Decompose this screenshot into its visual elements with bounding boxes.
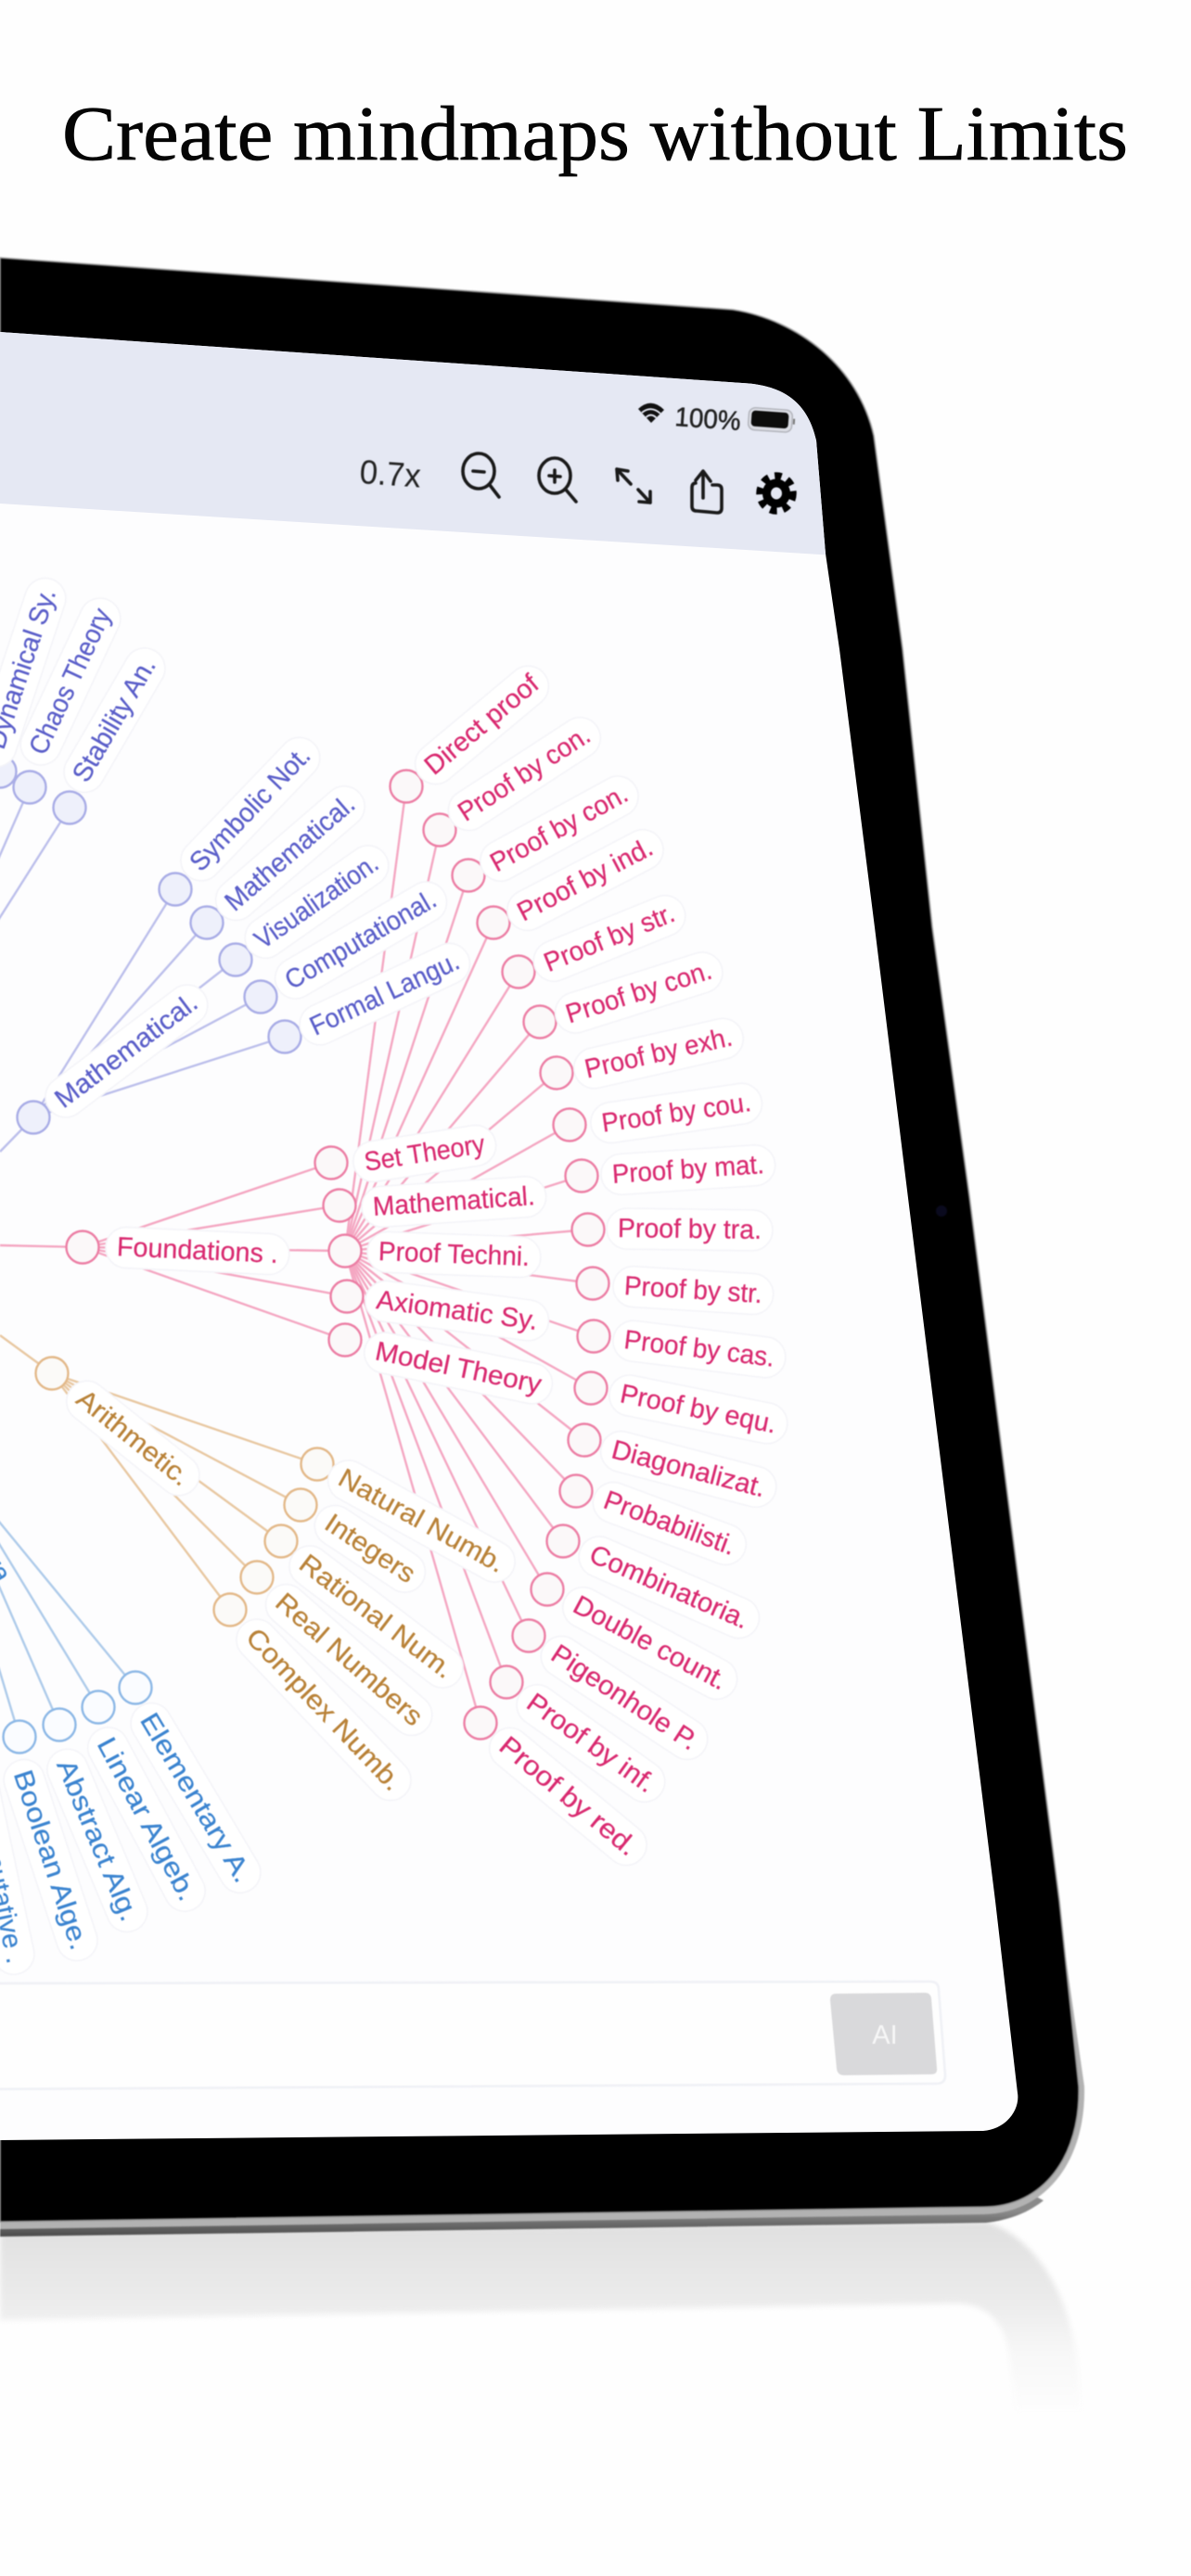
node: Mathematical.: Mathematical. xyxy=(372,1181,536,1222)
node: Proof by con. 2: Proof by con. xyxy=(485,779,634,878)
node: Proof by con. 1: Proof by con. xyxy=(453,721,596,827)
node: Direct proof xyxy=(388,671,540,805)
node: Proof by red. xyxy=(464,1706,655,1873)
toolbar xyxy=(0,325,835,555)
node: Double count. xyxy=(529,1571,722,1690)
node: Commutative . xyxy=(0,1768,38,1978)
branch: foundations nodes xyxy=(67,657,791,1873)
icon: zoom in xyxy=(539,458,576,502)
node: Proof by red.: Proof by red. xyxy=(493,1731,643,1862)
node: Proof by cas. xyxy=(575,1319,772,1367)
node: Stability An.: Stability An. xyxy=(67,653,162,787)
node: Diagonalizat.: Diagonalizat. xyxy=(608,1435,769,1503)
node: Elementary A. xyxy=(119,1671,268,1900)
node: Elementary A.: Elementary A. xyxy=(134,1708,258,1888)
node: Proof by cou.: Proof by cou. xyxy=(600,1088,753,1139)
node: Combinatoria.: Combinatoria. xyxy=(585,1539,753,1635)
node: Axiomatic Sy.: Axiomatic Sy. xyxy=(375,1285,540,1336)
node: Probabilisti. xyxy=(558,1473,731,1556)
node: Proof by mat. xyxy=(564,1155,763,1194)
icon: share xyxy=(692,471,722,513)
node: Proof by str. 1: Proof by str. xyxy=(540,899,679,978)
node: Foundations . xyxy=(67,1226,290,1275)
node: Proof by tra.: Proof by tra. xyxy=(618,1214,762,1245)
icon: battery xyxy=(748,407,796,433)
node: Chaos Theory xyxy=(11,607,113,805)
node: Proof by str. 1 xyxy=(501,909,675,990)
node: Proof by exh.: Proof by exh. xyxy=(582,1023,736,1085)
node: Complex Numb. xyxy=(213,1593,419,1809)
node: Proof by con. 1 xyxy=(421,733,591,848)
node: Double count.: Double count. xyxy=(568,1590,732,1696)
node: Rational Num.: Rational Num. xyxy=(293,1549,459,1685)
connectors: mathematical branch xyxy=(0,787,285,1152)
node: Model Theory: Model Theory xyxy=(373,1336,544,1400)
node: Natural Numb.: Natural Numb. xyxy=(333,1463,510,1579)
node: Abstract Alg.: Abstract Alg. xyxy=(50,1755,145,1926)
node: Computational.: Computational. xyxy=(280,885,442,996)
branch: arithmetic nodes xyxy=(35,1358,522,1809)
node: Proof by con. 3: Proof by con. xyxy=(562,956,715,1029)
node: Pigeonhole P.: Pigeonhole P. xyxy=(545,1639,703,1756)
AI button xyxy=(830,1993,937,2075)
node: Proof Techni. xyxy=(328,1231,542,1278)
tablet frame xyxy=(0,258,1084,2237)
node: Arithmetic. xyxy=(35,1358,208,1504)
node: Proof by str. 2: Proof by str. xyxy=(623,1271,763,1309)
node: Proof by str. 2 xyxy=(575,1265,761,1306)
node: Set Theory xyxy=(315,1122,499,1185)
node: Axiomatic Sy. xyxy=(330,1279,551,1344)
node: Foundations .: Foundations . xyxy=(116,1232,279,1269)
node: Mathematical. xyxy=(189,797,356,940)
node: Boolean Alge.: Boolean Alge. xyxy=(7,1766,94,1954)
screen xyxy=(0,332,1018,2140)
node: Chaos Theory: Chaos Theory xyxy=(24,604,118,759)
node: Real Numbers xyxy=(241,1562,441,1743)
node: Direct proof: Direct proof xyxy=(419,669,545,781)
node: Proof by con. 2 xyxy=(451,792,629,894)
front camera xyxy=(936,1205,947,1217)
icon: wifi xyxy=(638,403,664,423)
node: Boolean Alge. xyxy=(0,1721,103,1966)
node: Abstract Alg. xyxy=(41,1708,154,1938)
node: Combinatoria. xyxy=(545,1523,744,1628)
mindmap xyxy=(0,573,791,1978)
icon: expand xyxy=(617,469,650,503)
reflection of tablet on surface xyxy=(0,2222,1081,2411)
node: Natural Numb. xyxy=(301,1448,522,1589)
node: Visualization. xyxy=(217,861,379,977)
icon: settings gear xyxy=(760,476,793,511)
node: Proof by cas.: Proof by cas. xyxy=(622,1325,776,1373)
node: Computational. xyxy=(243,881,437,1014)
node: Proof by exh. xyxy=(538,1029,733,1090)
branch: mathematical nodes xyxy=(0,573,477,1133)
node: Mathematical. parent: Mathematical. xyxy=(49,988,203,1115)
node: Model Theory xyxy=(328,1324,556,1408)
toolbar icons xyxy=(463,453,722,513)
node: Proof by mat.: Proof by mat. xyxy=(611,1150,765,1190)
node: Proof by cou. xyxy=(551,1097,750,1142)
input bar xyxy=(0,1982,945,2089)
node: Mathematical.: Mathematical. xyxy=(220,789,361,917)
node: Linear Algeb. xyxy=(81,1691,212,1919)
node: Complex Numb.: Complex Numb. xyxy=(239,1623,408,1797)
node: Pigeonhole P. xyxy=(510,1617,695,1751)
node: Mathematical. xyxy=(323,1175,547,1229)
node: Proof Techni.: Proof Techni. xyxy=(378,1237,530,1272)
zoom level: 0.7x xyxy=(358,453,422,495)
tablet dark lower rim xyxy=(0,2188,1044,2237)
title: Create mindmaps without Limits xyxy=(62,91,1128,177)
node: Mathematical. parent xyxy=(15,987,200,1135)
node: Visualization.: Visualization. xyxy=(250,848,384,955)
node: Proof by con. 3 xyxy=(521,966,712,1040)
node: Symbolic Not.: Symbolic Not. xyxy=(184,741,316,877)
node: Proof by equ. xyxy=(573,1371,774,1435)
AI button background xyxy=(830,1993,937,2075)
node: Probabilisti.: Probabilisti. xyxy=(599,1486,739,1562)
node: Integers: Integers xyxy=(319,1509,421,1589)
battery percentage: 100% xyxy=(674,402,742,437)
icon: zoom out xyxy=(463,453,499,497)
node: Proof by ind. xyxy=(475,839,653,940)
connectors: arithmetic branch xyxy=(0,1335,317,1610)
node: Real Numbers: Real Numbers xyxy=(269,1588,429,1732)
node: Stability An. xyxy=(52,665,156,825)
node: Symbolic Not. xyxy=(160,729,328,905)
node: Proof by inf. xyxy=(488,1664,653,1793)
node: Arithmetic.: Arithmetic. xyxy=(70,1384,196,1492)
node: Linear Algeb.: Linear Algeb. xyxy=(91,1732,202,1906)
node: Integers xyxy=(284,1489,433,1600)
node: Proof by inf.: Proof by inf. xyxy=(521,1688,660,1799)
node: Set Theory: Set Theory xyxy=(363,1129,487,1178)
toolbar background xyxy=(0,325,835,555)
node: Formal Langu.: Formal Langu. xyxy=(305,947,464,1041)
AI button label: AI xyxy=(872,2021,898,2050)
tablet bezel xyxy=(0,258,1079,2222)
tablet light rim xyxy=(0,1938,1084,2229)
node: Proof by equ.: Proof by equ. xyxy=(618,1379,779,1439)
connectors: foundations branch xyxy=(0,786,594,1723)
node: Proof by ind.: Proof by ind. xyxy=(513,833,658,927)
node: Proof by tra. xyxy=(570,1211,761,1248)
connectors: algebra branch xyxy=(0,1521,126,1721)
branch: algebra nodes xyxy=(0,1492,268,1978)
status bar xyxy=(638,402,796,437)
node: Rational Num. xyxy=(265,1524,471,1696)
node: Diagonalizat. xyxy=(566,1422,762,1497)
